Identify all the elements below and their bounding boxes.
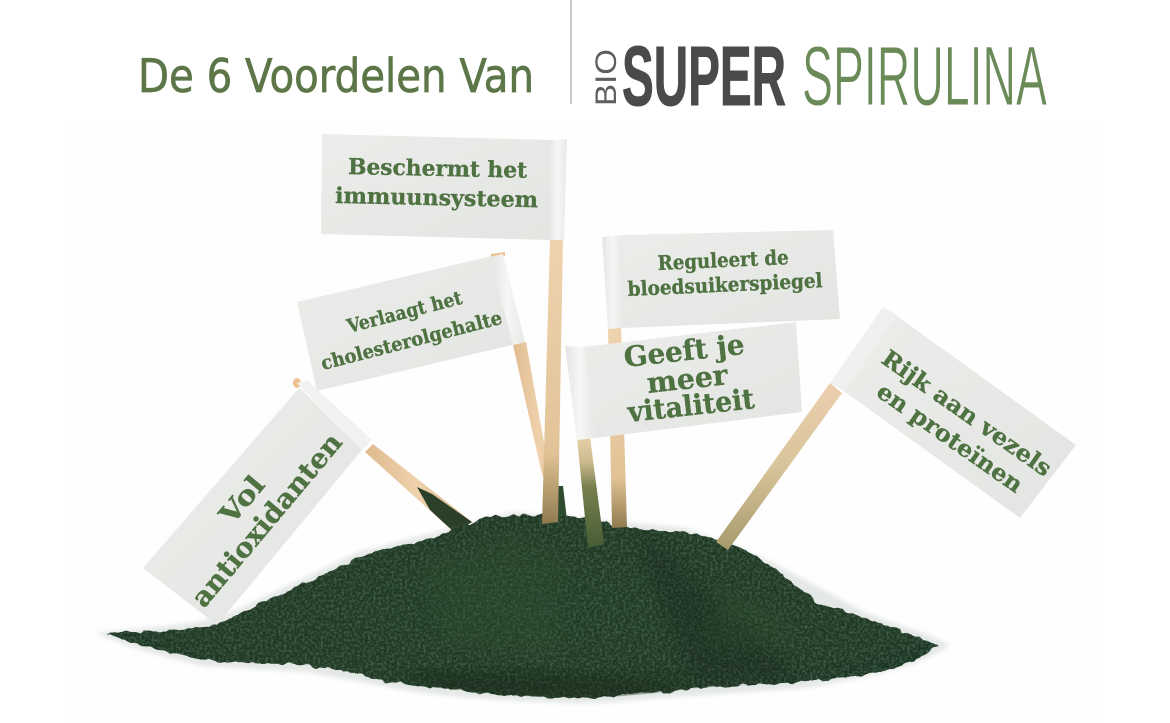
flag: Rijk aan vezels en proteinen: en proteïnen	[872, 378, 1028, 499]
mound body	[106, 515, 938, 698]
title: De 6 Voordelen Van: De 6 Voordelen Van	[138, 49, 534, 103]
stick in powder: Geeft je meer vitaliteit	[577, 437, 604, 548]
flag: Geeft je meer vitaliteit: vitaliteit	[625, 382, 756, 429]
flag: Geeft je meer vitaliteit	[565, 322, 802, 440]
flag: Verlaagt het cholesterolgehalte	[297, 252, 525, 391]
flag fold	[602, 235, 623, 329]
flag body	[583, 322, 802, 438]
flag: Reguleert de bloedsuikerspiegel: bloedsuikerspiegel	[627, 268, 823, 301]
stick powder: Vol antioxidanten	[417, 487, 472, 533]
flag label: Beschermt het	[348, 154, 528, 184]
logo word: SUPER: SUPER	[622, 29, 786, 123]
flag label: Reguleert de	[657, 245, 789, 275]
photo background	[68, 120, 1100, 723]
flag: Reguleert de bloedsuikerspiegel	[602, 230, 840, 329]
logo word: BIO: BIO	[590, 49, 623, 106]
flag: Vol antioxidanten: antioxidanten	[186, 427, 349, 613]
flag label: Vol	[213, 470, 271, 531]
flag body	[143, 388, 362, 625]
flag: Geeft je meer vitaliteit: meer	[645, 358, 731, 400]
stick upper part	[513, 342, 566, 520]
flag body	[622, 230, 840, 328]
flag body	[321, 134, 550, 240]
flag: Beschermt het immuunsysteem: immuunsysteem	[335, 183, 538, 213]
stick lower powder part	[556, 486, 567, 520]
stick: Vol antioxidanten	[365, 444, 472, 533]
powder mound	[96, 512, 950, 703]
flag fold	[548, 139, 567, 240]
flag label: Geeft je	[622, 328, 746, 374]
flag body	[845, 311, 1076, 518]
flag: Beschermt het immuunsysteem	[321, 134, 567, 240]
flag fold	[490, 254, 525, 345]
flag fold	[830, 307, 897, 392]
flag label: Rijk aan vezels	[877, 345, 1057, 482]
stick: Rijk aan vezels	[716, 383, 842, 550]
mound dust halo	[96, 512, 950, 703]
stick tip	[491, 252, 505, 258]
flag: Verlaagt het cholesterolgehalte: cholesterolgehalte	[319, 307, 504, 375]
stick tip: Vol antioxidanten	[293, 378, 301, 388]
mound shading	[408, 542, 800, 698]
flag body	[297, 256, 516, 391]
flag: Rijk aan vezels en proteinen	[830, 307, 1076, 518]
stick: Verlaagt het cholesterolgehalte	[513, 342, 567, 520]
stick: Reguleert de bloedsuikerspiegel	[608, 326, 627, 528]
logo: Bio Super Spirulina	[590, 29, 1047, 123]
flag fold	[297, 380, 372, 450]
flag fold	[565, 346, 595, 440]
stick: Beschermt het immuunsysteem	[542, 238, 563, 524]
flag label: Verlaagt het	[344, 287, 465, 338]
header divider	[570, 0, 572, 104]
flag: Vol antioxidanten	[143, 380, 372, 625]
